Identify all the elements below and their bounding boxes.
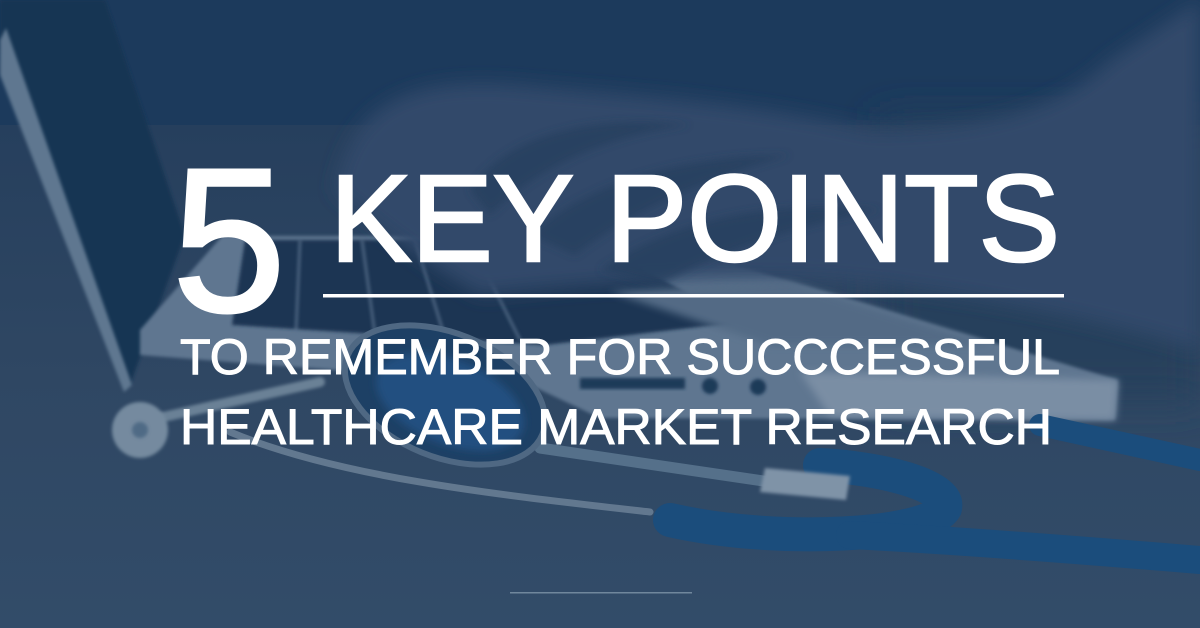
hands (335, 0, 1200, 350)
tubing (670, 465, 945, 534)
metal clip (760, 468, 850, 500)
metal tubes (230, 432, 650, 512)
heading underline (323, 294, 1064, 298)
laptop screen (0, 0, 185, 385)
laptop front details (580, 378, 685, 389)
title graphic (172, 126, 1064, 455)
right background (880, 120, 1200, 400)
lit laptop edge (800, 372, 1118, 420)
ear tip (112, 402, 168, 458)
laptop base (140, 236, 1118, 420)
trackpad highlight (610, 282, 990, 345)
big number 5: 5 (172, 126, 286, 355)
desk highlight (510, 592, 692, 594)
stethoscope (150, 382, 1200, 560)
heading: key points: KEY POINTS (330, 151, 1060, 288)
subtitle line 1: TO REMEMBER FOR SUCCCESSFUL (180, 329, 1060, 385)
subtitle line 2: HEALTHCARE MARKET RESEARCH (180, 399, 1052, 455)
chest piece (324, 298, 566, 492)
keyboard (232, 240, 740, 345)
